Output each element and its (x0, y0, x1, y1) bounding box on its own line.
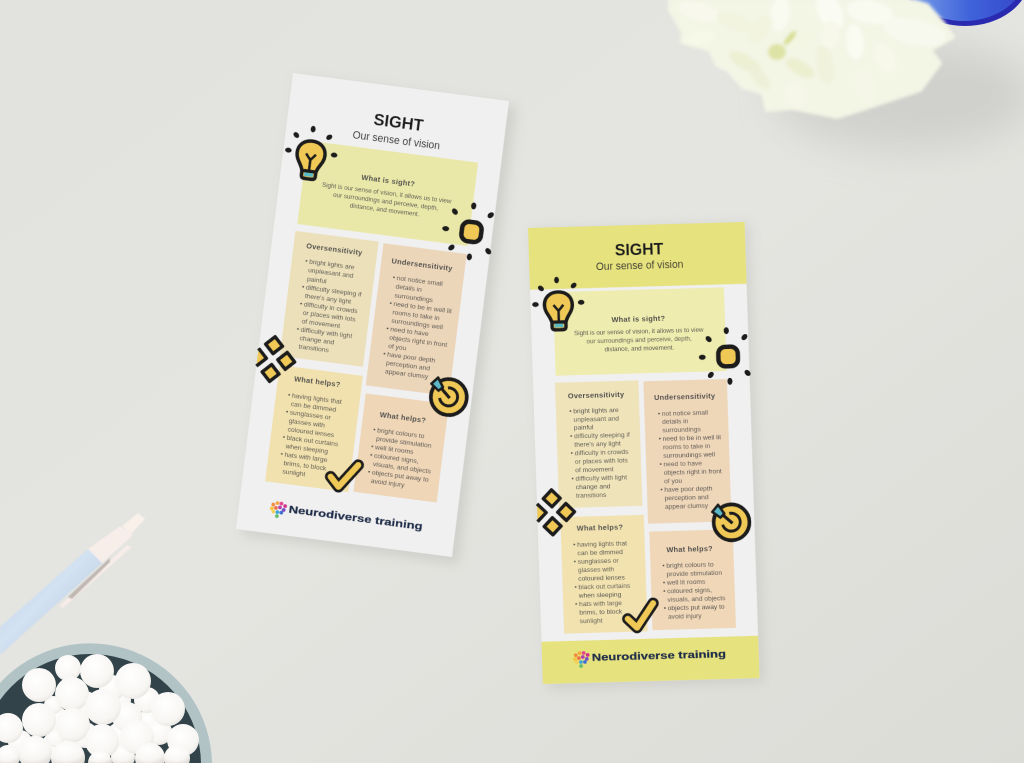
heading: What helps? (577, 522, 624, 533)
pen tip (122, 513, 145, 534)
list: well lit rooms (666, 579, 706, 587)
list: can be dimmed (290, 401, 337, 414)
list: transitions (298, 343, 330, 354)
icon: four diamonds (255, 335, 297, 384)
list: • (569, 408, 572, 415)
list: avoid injury (668, 613, 702, 621)
list: • (570, 434, 573, 441)
heading: Undersensitivity (391, 256, 454, 273)
list: unpleasant and (573, 415, 619, 424)
list: unpleasant and (308, 267, 354, 280)
intro text: our surroundings and perceive, depth, (333, 192, 439, 212)
panel: oversensitivity (555, 380, 642, 508)
list: having lights that (291, 392, 342, 406)
list: • (664, 605, 667, 612)
title: SIGHT (373, 110, 425, 135)
icon: target with arrow (712, 504, 750, 541)
list: • (386, 325, 390, 333)
list: rooms to take in (663, 443, 711, 451)
logo: Neurodiverse training (269, 500, 423, 537)
list: appear clumsy (385, 368, 429, 381)
heading: Undersensitivity (654, 391, 716, 402)
list: provide stimulation (376, 436, 432, 450)
pen clip (59, 545, 132, 608)
list: provide stimulation (667, 570, 722, 578)
list: brims, to block (579, 608, 623, 617)
balls (0, 654, 199, 763)
list: difficulty with light (300, 326, 353, 340)
list: of you (664, 478, 683, 485)
panel: what helps left (265, 365, 363, 492)
list: there's any light (304, 293, 352, 306)
shadow of right card (532, 224, 764, 689)
intro text: Sight is our sense of vision, it allows us to view (574, 327, 704, 337)
list: visuals, and objects (667, 595, 726, 604)
pen grip (88, 526, 133, 563)
bowl (0, 643, 212, 763)
list: need to have (663, 460, 702, 468)
list: objects right in front (389, 334, 448, 349)
list: have poor depth (664, 485, 713, 494)
shadow of left card (242, 78, 516, 564)
panel: what helps left (560, 515, 648, 634)
list: objects put away to (371, 469, 429, 484)
list: details in (662, 418, 689, 426)
list: have poor depth (387, 351, 436, 364)
icon: light bulb (282, 123, 341, 182)
list: • (660, 487, 663, 494)
list: • (574, 559, 577, 566)
list: can be dimmed (577, 549, 623, 557)
icon: four diamonds (537, 489, 575, 535)
header band (528, 222, 747, 290)
list: • (573, 542, 576, 549)
list: objects put away to (668, 604, 725, 612)
list: there's any light (574, 441, 621, 449)
list: • (389, 300, 393, 307)
icon: target with arrow (428, 377, 469, 417)
list: surroundings well (663, 452, 716, 460)
list: glasses with (578, 566, 615, 574)
title: SIGHT (614, 239, 664, 259)
panel: what helps right (353, 393, 449, 503)
list: avoid injury (370, 478, 405, 489)
list: need to be in well lit (393, 301, 452, 315)
icon: sun (698, 326, 752, 386)
list: • (383, 351, 387, 358)
list: not notice small (662, 409, 709, 418)
list: painful (307, 276, 327, 285)
list: • (302, 284, 305, 291)
list: coloured signs, (374, 453, 419, 465)
list: surroundings (394, 292, 434, 304)
list: details in (395, 284, 422, 294)
intro text: Sight is our sense of vision, it allows us to view (322, 182, 452, 206)
list: visuals, and objects (373, 461, 432, 476)
panel: what is sight (553, 287, 727, 376)
list: • (285, 409, 289, 416)
panel: oversensitivity (280, 231, 379, 367)
list: glasses with (288, 418, 326, 429)
subtitle: Our sense of vision (352, 129, 441, 153)
photo prop: blue glass (900, 0, 1024, 26)
list: • (571, 450, 574, 458)
heading: What helps? (379, 410, 427, 425)
list: • (370, 452, 373, 459)
list: • (367, 469, 371, 476)
shadow under flower and glass (775, 40, 1024, 150)
list: well lit rooms (374, 444, 414, 456)
list: • (282, 434, 286, 441)
icon: check mark (627, 603, 654, 628)
list: rooms to take in (392, 309, 440, 322)
logo text: Neurodiverse training (288, 504, 423, 533)
list: hats with large (284, 451, 328, 464)
list: • (658, 411, 661, 418)
photo prop: bowl of white balls (0, 643, 212, 763)
brain icon (269, 500, 288, 519)
list: bright colours to (666, 562, 714, 570)
list: • (574, 584, 578, 591)
list: perception and (665, 494, 709, 502)
list: need to be in well lit (663, 434, 721, 443)
list: • (371, 444, 374, 451)
list: difficulty sleeping if (305, 284, 362, 298)
list: surroundings (662, 426, 702, 435)
list: change and (299, 335, 335, 346)
panel: right flyer (yellow band version) (528, 222, 762, 684)
list: bright lights are (573, 407, 619, 415)
list: • (659, 436, 662, 443)
list: perception and (386, 360, 431, 372)
list: transitions (576, 492, 607, 500)
list: painful (574, 424, 594, 432)
icon: check mark (330, 462, 358, 489)
list: hats with large (579, 600, 622, 608)
heading: Oversensitivity (306, 241, 364, 258)
list: • (659, 461, 663, 469)
list: coloured signs, (667, 587, 712, 595)
list: brims, to block (283, 460, 327, 472)
panel: what is sight (297, 141, 478, 246)
heading: What helps? (666, 544, 713, 555)
list: • (296, 326, 300, 333)
list: difficulty sleeping if (574, 432, 630, 441)
list: when sleeping (578, 592, 622, 600)
list: change and (576, 483, 611, 491)
list: appear clumsy (665, 503, 709, 511)
logo text: Neurodiverse training (592, 649, 726, 664)
list: sunlight (580, 617, 603, 625)
list: coloured lenses (578, 574, 626, 583)
panel: undersensitivity (643, 379, 732, 524)
list: of movement (301, 318, 341, 330)
panel: what helps right (649, 529, 736, 630)
list: • (299, 301, 303, 308)
intro text: our surroundings and perceive, depth, (586, 336, 692, 345)
icon: light bulb (531, 276, 585, 331)
pen barrel (0, 549, 102, 655)
list: not notice small (396, 275, 444, 288)
list: • (662, 563, 665, 570)
logo: Neurodiverse training (573, 647, 726, 668)
list: bright lights are (309, 259, 355, 272)
list: black out curtains (578, 583, 631, 591)
heading: What is sight? (361, 173, 416, 189)
heading: What is sight? (611, 314, 666, 324)
list: • (305, 258, 309, 266)
heading: What helps? (294, 374, 341, 389)
list: of you (388, 343, 407, 352)
list: • (392, 275, 396, 282)
intro text: distance, and movement. (349, 203, 420, 219)
panel: undersensitivity (366, 243, 467, 396)
heading: Oversensitivity (568, 390, 625, 400)
list: or places with lots (302, 310, 357, 323)
panel: left flyer (white version) (236, 73, 511, 557)
list: • (373, 427, 377, 434)
list: sunlight (282, 468, 306, 478)
intro text: distance, and movement. (604, 345, 675, 353)
list: • (575, 601, 578, 608)
list: of movement (575, 466, 614, 474)
list: • (571, 476, 575, 483)
list: surroundings well (391, 318, 444, 331)
list: bright colours to (377, 427, 425, 440)
list: black out curtains (286, 435, 339, 448)
list: • (288, 392, 291, 399)
brain icon (573, 651, 590, 668)
list: sunglasses or (578, 558, 620, 566)
list: sunglasses or (289, 409, 332, 422)
icon: sun (439, 199, 498, 263)
list: • (663, 588, 666, 595)
list: • (280, 451, 284, 458)
photo prop: white chrysanthemum flower (670, 0, 953, 117)
list: or places with lots (575, 457, 629, 466)
list: coloured lenses (287, 426, 335, 439)
list: having lights that (577, 541, 627, 549)
photo prop: pen (0, 513, 145, 655)
footer band (542, 636, 759, 684)
list: when sleeping (284, 443, 329, 455)
list: difficulty in crowds (303, 301, 359, 315)
list: • (663, 580, 666, 587)
list: objects right in front (664, 468, 722, 477)
list: difficulty in crowds (575, 449, 629, 457)
list: difficulty with light (575, 474, 627, 483)
subtitle: Our sense of vision (596, 259, 684, 273)
list: need to have (390, 326, 429, 338)
